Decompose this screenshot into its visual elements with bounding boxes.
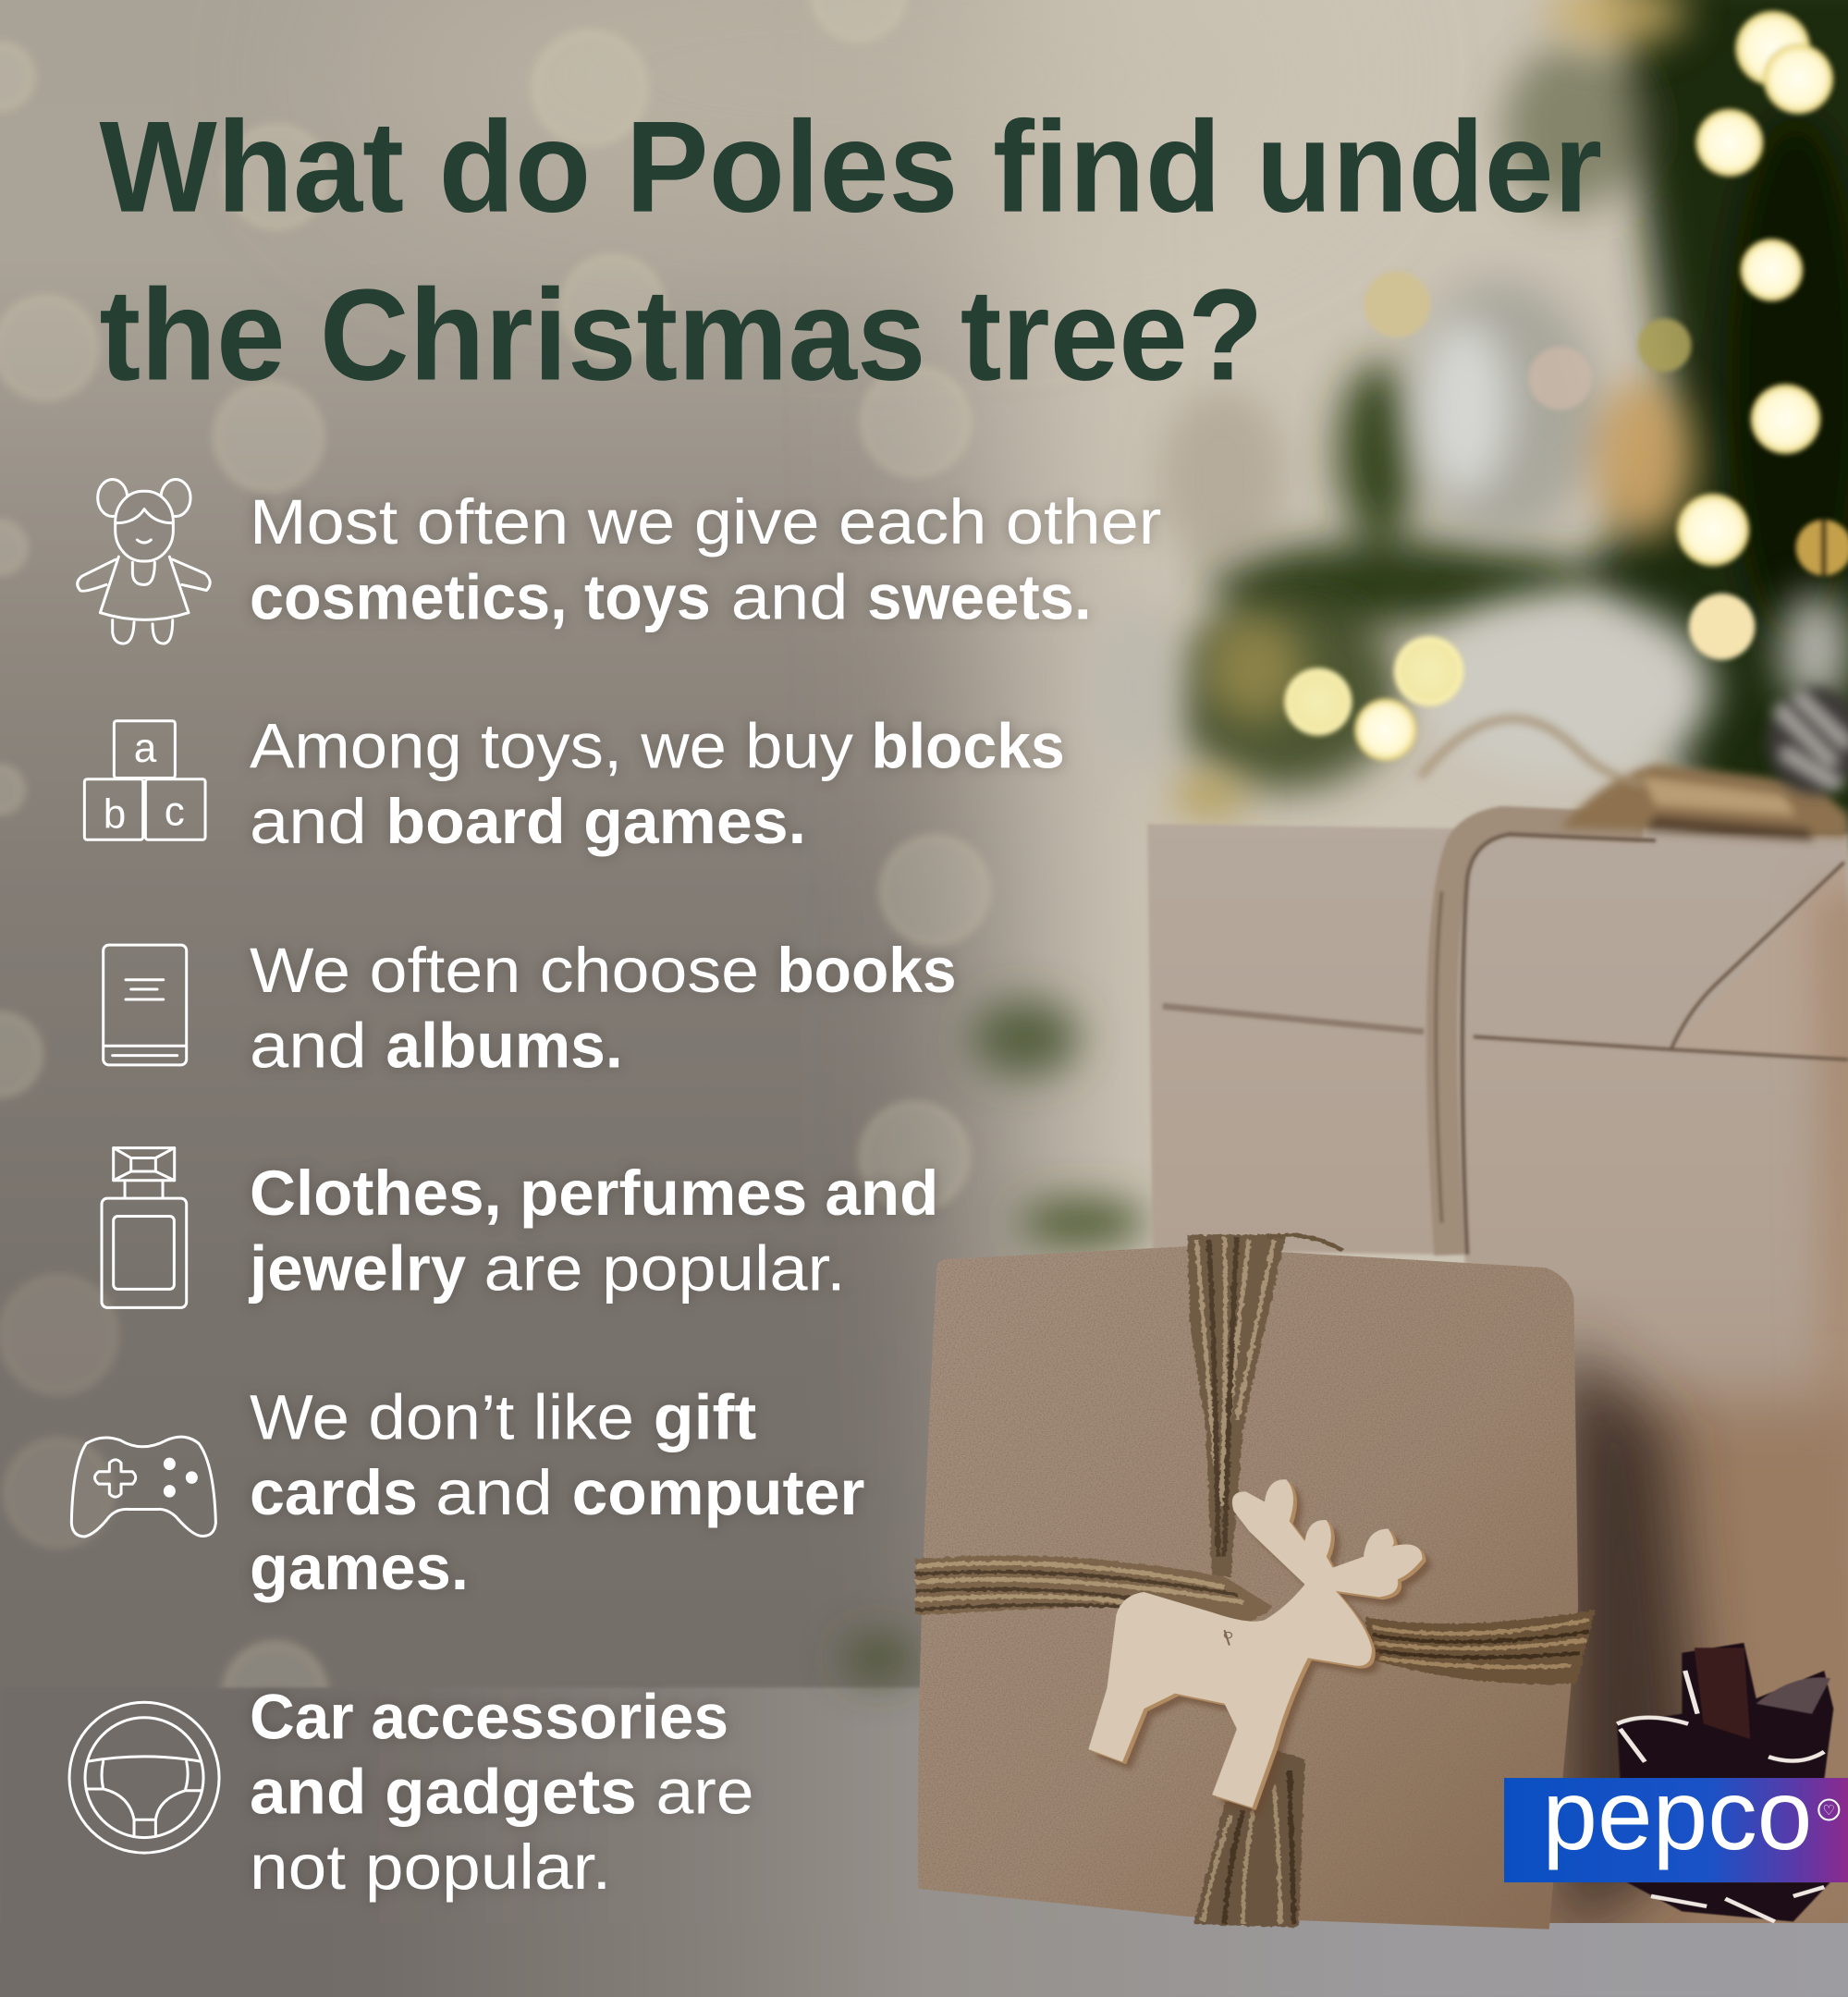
- twine vertical bottom: [1193, 1749, 1304, 1928]
- text: car accessories: not popular.: [250, 1832, 611, 1903]
- logo: pepco: pepco: [1542, 1759, 1812, 1870]
- icon: perfume bottle: [102, 1148, 187, 1307]
- item 1: cosmetics, toys and sweets: [78, 479, 1161, 643]
- item 4: clothes, perfumes, jewelry: [102, 1148, 938, 1307]
- twine horizontal left: [915, 1555, 1274, 1623]
- logo: pepco: ♡: [1823, 1803, 1835, 1819]
- pinecone: [1617, 1643, 1833, 1921]
- wrapping paper folds: [1163, 863, 1848, 1060]
- text: books: albums.: [386, 1010, 623, 1081]
- front gift box: [915, 1234, 1596, 1930]
- text: books: and: [250, 1010, 367, 1081]
- title: the Christmas tree?: [99, 263, 1264, 408]
- text: most often: sweets.: [867, 561, 1092, 632]
- item 5: gift cards and computer games: [71, 1382, 864, 1603]
- text: among toys: Among toys, we buy: [250, 711, 854, 782]
- gift bow on back box: [1420, 718, 1848, 840]
- text: most often: cosmetics, toys: [250, 561, 711, 632]
- item 6: car accessories and gadgets: [69, 1681, 754, 1903]
- text: among toys: and: [250, 786, 367, 857]
- text: books: We often choose: [250, 935, 759, 1006]
- floor: [0, 1687, 1848, 1997]
- reindeer ornament: [1088, 1479, 1431, 1816]
- text: gift cards: and: [435, 1457, 553, 1528]
- text: car accessories: Car accessories: [250, 1681, 728, 1752]
- text: gift cards: gift: [654, 1382, 756, 1453]
- twine horizontal right: [1366, 1610, 1596, 1684]
- text: most often: Most often we give each other: [250, 486, 1161, 557]
- white baubles: [1088, 0, 1848, 819]
- text: car accessories: [250, 1681, 754, 1903]
- icon: alphabet blocks: c: [165, 790, 185, 835]
- text: gift cards: cards: [250, 1457, 418, 1528]
- right side of the back gift: [1548, 1401, 1848, 1949]
- item 2: blocks and board games: [84, 711, 1065, 857]
- text: car accessories: are: [656, 1757, 754, 1828]
- twine vertical top: [915, 1234, 1596, 1928]
- text: books: books: [777, 935, 957, 1006]
- text: gift cards: We don’t like: [250, 1382, 634, 1453]
- icon: alphabet blocks: b: [104, 791, 126, 837]
- text: car accessories: and gadgets: [250, 1757, 637, 1828]
- icon: game controller: [71, 1437, 215, 1537]
- text: books: [250, 935, 957, 1081]
- text: clothes: are popular.: [484, 1232, 846, 1304]
- text: clothes: jewelry: [248, 1232, 466, 1304]
- text: most often: [250, 486, 1161, 632]
- tree lights: [1284, 10, 1848, 762]
- text: among toys: [250, 711, 1065, 857]
- faint bokeh lights: [0, 0, 988, 1745]
- blurred pinecone: [1767, 688, 1848, 795]
- tree foliage: [843, 0, 1848, 1681]
- gift shadow: [1560, 1337, 1707, 1949]
- text: clothes: [248, 1158, 938, 1304]
- icon: steering wheel: [69, 1702, 219, 1853]
- text: clothes: Clothes, perfumes and: [250, 1158, 938, 1229]
- text: gift cards: [250, 1382, 864, 1603]
- text: among toys: blocks: [871, 711, 1065, 782]
- text: gift cards: games.: [250, 1532, 469, 1603]
- floor foreground: [0, 1923, 1848, 1997]
- text: gift cards: computer: [572, 1457, 864, 1528]
- title: What do Poles find under: [99, 94, 1602, 239]
- text: most often: and: [731, 561, 849, 632]
- icon: doll: [78, 479, 210, 643]
- icon: alphabet blocks: [84, 721, 205, 839]
- back gift string: [1436, 822, 1656, 1255]
- item 3: books and albums: [104, 935, 957, 1081]
- icon: book: [104, 945, 187, 1065]
- title: [99, 94, 1602, 408]
- icon: alphabet blocks: a: [134, 726, 157, 771]
- text: among toys: board games.: [386, 786, 806, 857]
- back gift box: [1147, 688, 1848, 1949]
